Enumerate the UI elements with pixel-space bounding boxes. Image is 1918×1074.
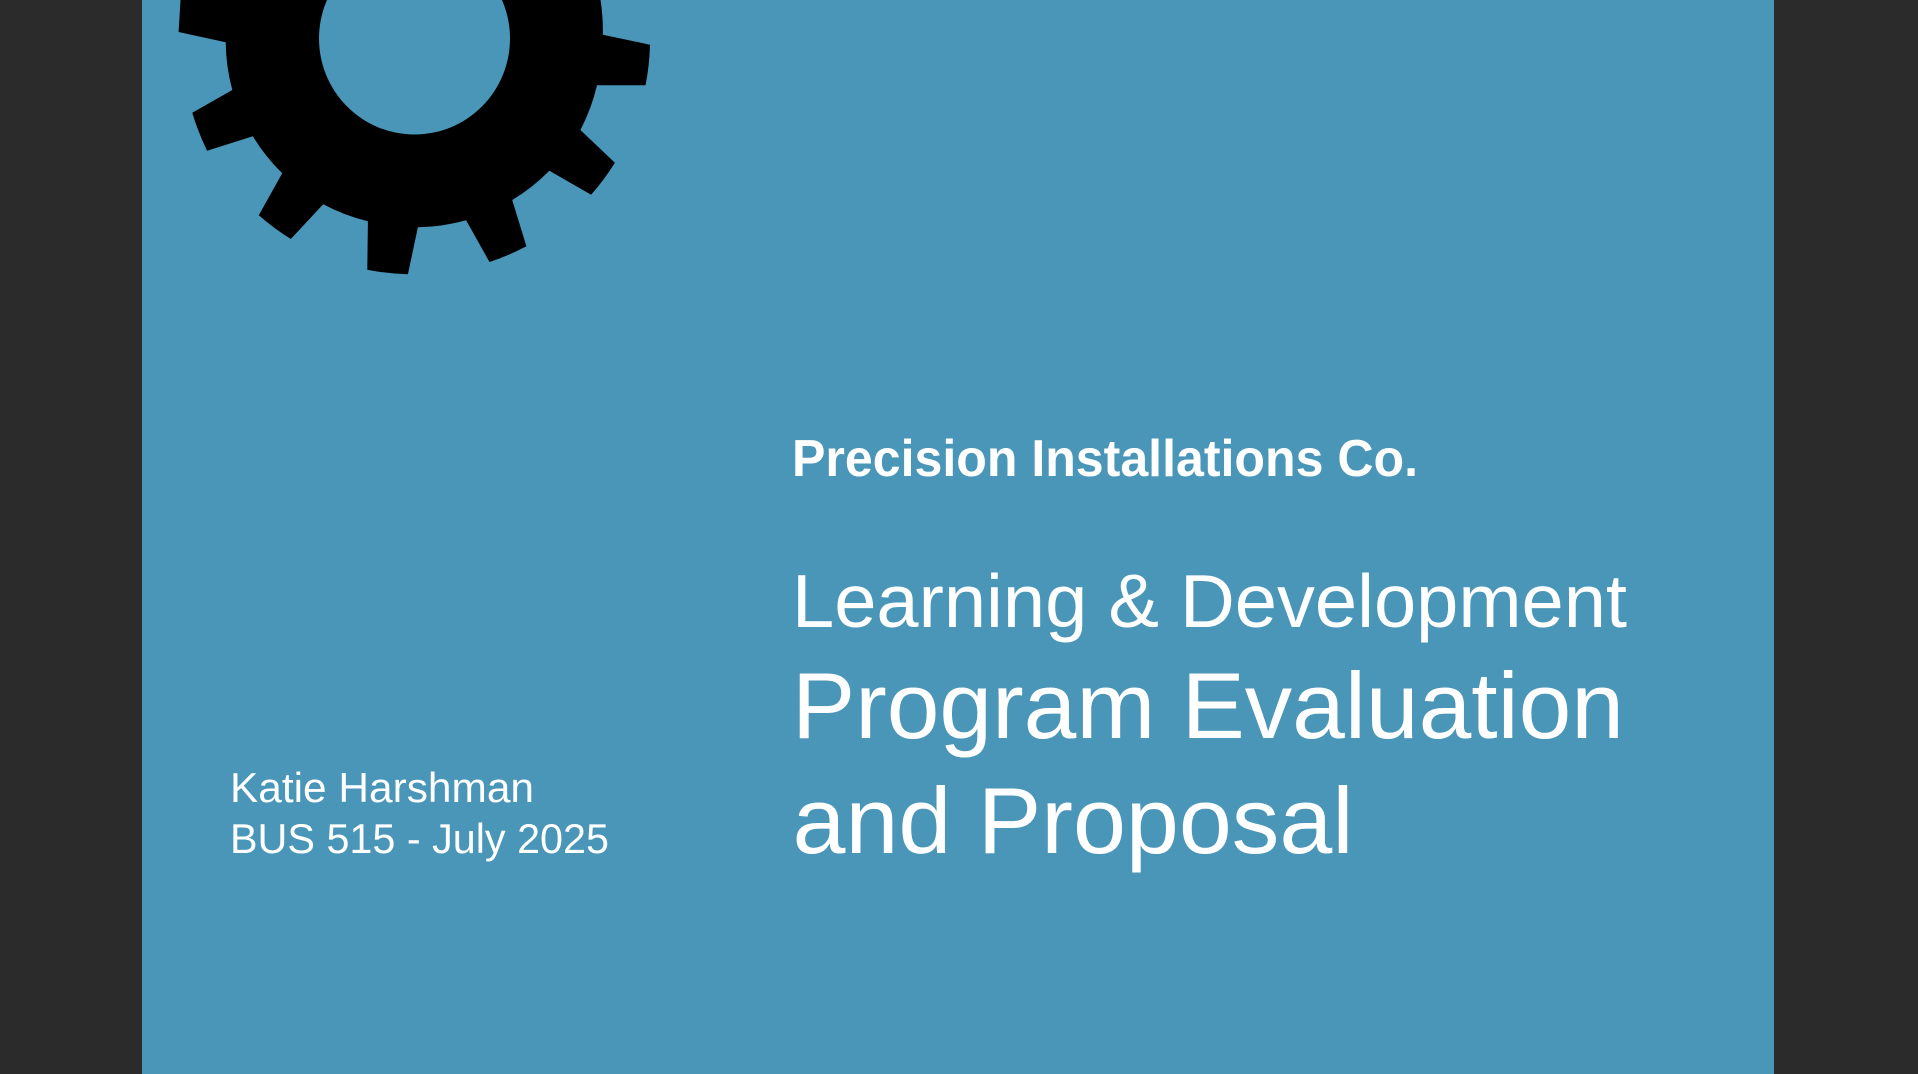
- title block: Program Evaluation: [792, 653, 1624, 758]
- company heading: Precision Installations Co.: [792, 430, 1418, 488]
- author and course block: [230, 764, 609, 862]
- title block: [792, 559, 1627, 873]
- title block: and Proposal: [792, 768, 1354, 873]
- author and course block: Katie Harshman: [230, 764, 534, 811]
- icon: black gear cropped by top edge: [179, 0, 650, 274]
- title block: Learning & Development: [792, 559, 1627, 643]
- author and course block: BUS 515 - July 2025: [230, 815, 609, 862]
